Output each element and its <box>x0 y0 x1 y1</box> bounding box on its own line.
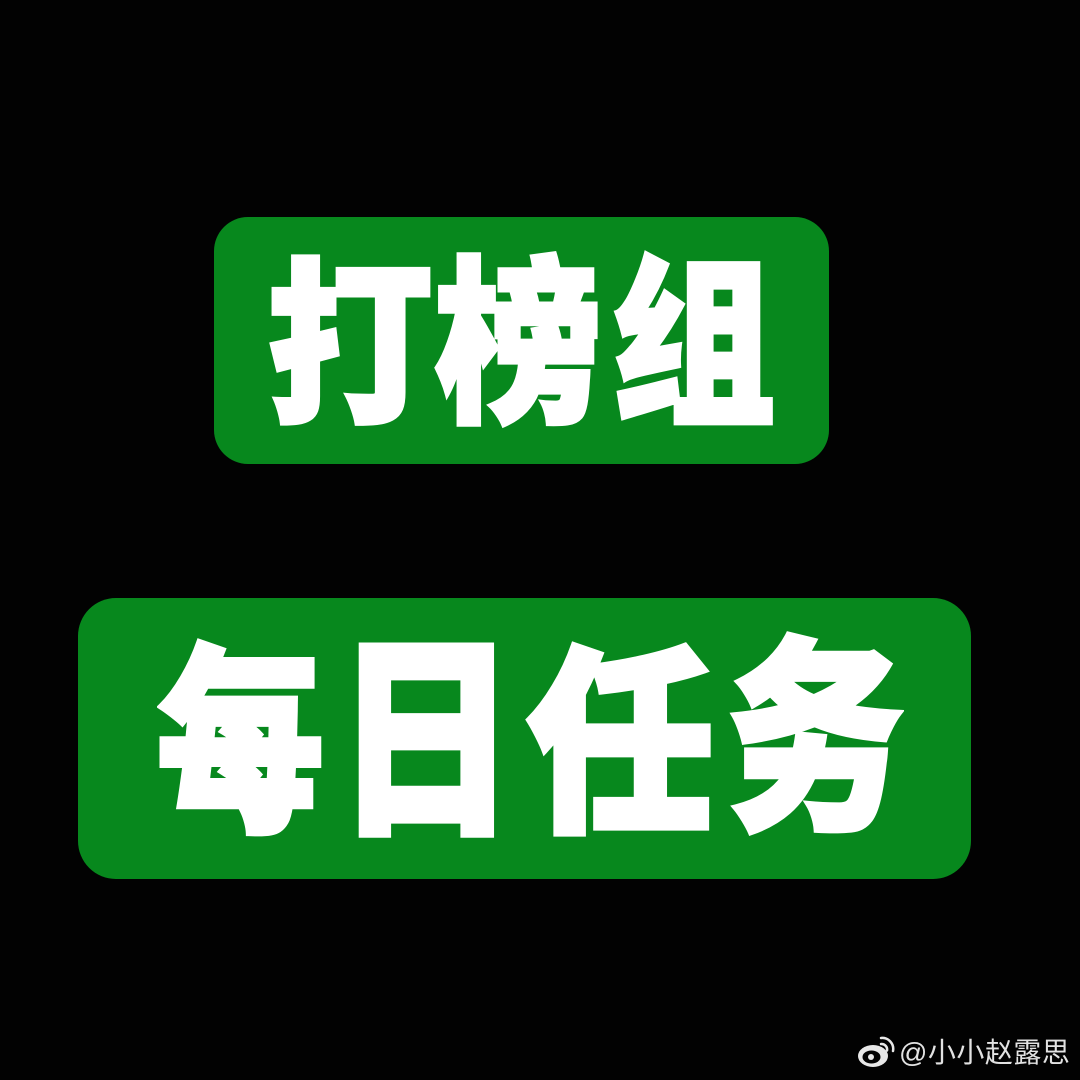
heading: 打榜组: 打 <box>267 247 433 445</box>
icon: weibo logo <box>858 1036 894 1067</box>
heading: 打榜组: 榜 <box>435 245 602 445</box>
heading: 每日任务: 务 <box>726 626 903 857</box>
heading: 打榜组: 组 <box>612 245 775 447</box>
heading: 每日任务: 日 <box>336 624 516 862</box>
heading: 每日任务 <box>157 624 904 862</box>
panel: top green label <box>214 217 829 464</box>
heading: 每日任务: 任 <box>527 635 714 858</box>
panel: bottom green label <box>78 598 971 879</box>
heading: 打榜组 <box>267 245 775 447</box>
watermark text: @小小赵露思 <box>899 1037 1070 1068</box>
heading: 每日任务: 每 <box>157 634 324 857</box>
